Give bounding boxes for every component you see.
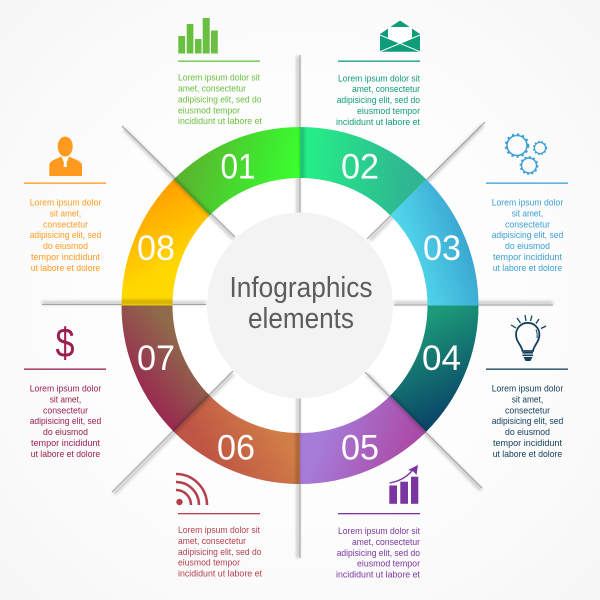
segment numbers [137,148,461,468]
segment numbers: 03 [423,229,461,268]
text block 01: eiusmod tempor [178,105,240,116]
text block 04: adipisicing elit, sed [492,416,563,427]
segment 04 [390,306,478,432]
panel 05 [336,465,420,581]
segment numbers: 01 [220,148,256,186]
text block 01 [178,72,262,127]
segment 07 [122,306,210,432]
panel 02 [336,20,420,128]
segmented ring [122,127,478,484]
text block 06: eiusmod tempor [178,558,240,569]
text block 08 [30,198,101,274]
icon: bar chart [178,18,218,54]
text block 03: sit amet, [512,208,543,219]
panel 04 [486,315,568,460]
text block 07: consectetur [43,405,88,416]
text block 03: tempor incididunt [493,252,562,263]
text block 03: Lorem ipsum dolor [492,198,563,208]
segment numbers: 04 [422,339,461,378]
text block 05 [336,526,420,581]
segment numbers: 05 [341,428,379,468]
text block 06: amet, consectetur [178,536,246,547]
text block 06: adipisicing elit, sed do [178,547,262,558]
text block 03: consectetur [505,219,550,230]
text block 02: eiusmod tempor [357,106,420,117]
text block 05: adipisicing elit, sed do [337,548,420,559]
icon: light bulb [511,315,546,361]
text block 03: ut labore et dolore [493,263,562,274]
text block 08: ut labore et dolore [31,263,100,274]
text block 04: sit amet, [512,394,543,405]
panel 03 [486,134,568,274]
text block 01: amet, consectetur [178,84,246,94]
title: Infographics [230,272,372,304]
panel 07 [24,319,106,460]
text block 04 [492,384,563,460]
text block 06 [178,525,262,580]
text block 07: sit amet, [50,394,81,405]
icon: dollar sign: $ [56,319,74,366]
text block 02 [336,73,420,128]
text block 02: incididunt ut labore et [336,117,420,128]
text block 04: do eiusmod [505,427,550,438]
icon: gears [506,134,546,174]
text block 07: tempor incididunt [31,438,100,449]
text block 04: ut labore et dolore [493,449,562,460]
text block 03: adipisicing elit, sed [492,230,563,241]
fold lines [42,55,553,558]
text block 02: Lorem ipsum dolor sit [338,73,420,84]
text block 08: adipisicing elit, sed [30,230,101,241]
panel 08 [24,136,106,274]
segment numbers: 06 [217,428,255,468]
text block 03 [492,198,563,274]
panel 06 [176,474,262,580]
text block 08: sit amet, [50,208,81,219]
segment 08 [122,179,210,306]
text block 02: adipisicing elit, sed do [337,95,420,106]
text block 04: consectetur [505,405,550,416]
segment numbers: 08 [137,229,175,268]
title: elements [248,303,354,335]
text block 01: incididunt ut labore et [178,116,262,127]
title [230,272,372,335]
segment 02 [300,127,426,215]
center circle [207,212,393,398]
text block 05: amet, consectetur [352,537,420,548]
text block 08: tempor incididunt [31,252,100,263]
icon: person [49,136,82,176]
icon: wifi signal [176,474,207,505]
text block 08: consectetur [43,219,88,230]
panel 01 [178,18,262,127]
ring fold shadows [115,120,428,490]
text block 05: Lorem ipsum dolor sit [338,526,420,537]
text block 01: Lorem ipsum dolor sit [178,72,260,84]
segment 06 [174,396,300,484]
text block 08: Lorem ipsum dolor [30,198,101,208]
segment numbers: 07 [137,339,175,378]
text block 06: incididunt ut labore et [178,569,262,580]
text block 04: Lorem ipsum dolor [492,384,563,394]
text block 08: do eiusmod [43,241,88,252]
text block 05: eiusmod tempor [357,559,420,570]
text block 02: amet, consectetur [352,84,420,95]
icon: envelope [380,20,420,52]
icon: growth chart [389,465,418,504]
text block 04: tempor incididunt [493,438,562,449]
text block 07: ut labore et dolore [31,449,100,460]
segment numbers: 02 [341,148,379,186]
segment 01 [174,127,300,215]
text block 05: incididunt ut labore et [336,570,420,581]
text block 01: adipisicing elit, sed do [178,94,262,105]
text block 06: Lorem ipsum dolor sit [178,525,260,536]
text block 07: do eiusmod [43,427,88,438]
segment 05 [300,396,426,484]
text block 03: do eiusmod [505,241,550,252]
text block 07: adipisicing elit, sed [30,416,101,427]
segment 03 [390,179,478,306]
text block 07 [30,384,101,460]
text block 07: Lorem ipsum dolor [30,384,101,394]
